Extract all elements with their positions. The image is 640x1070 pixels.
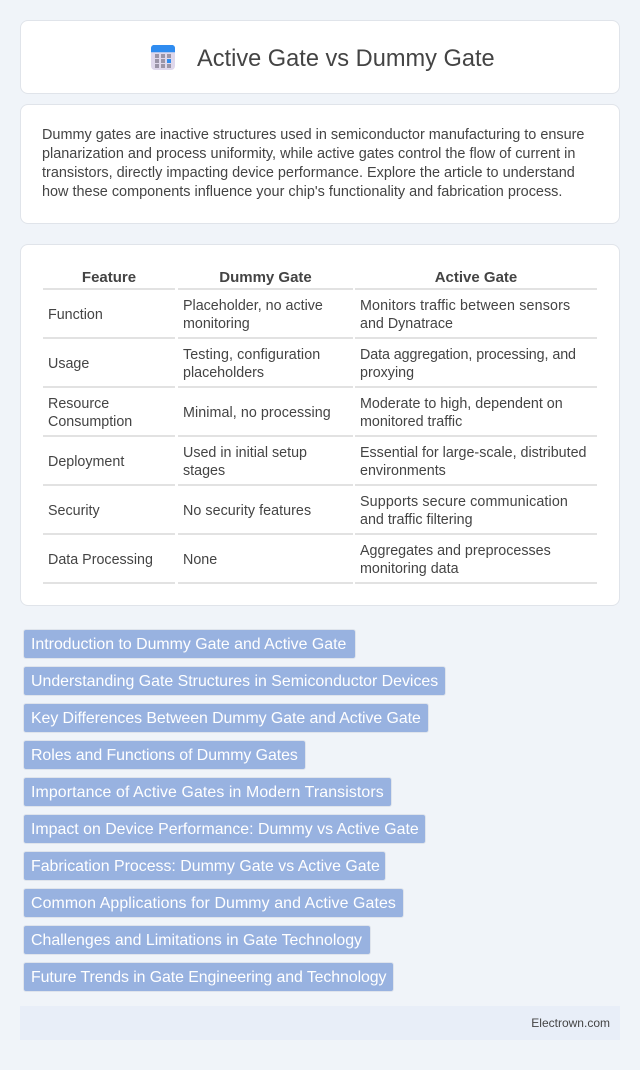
row: usage <box>48 347 576 381</box>
row: function: Function <box>48 307 103 323</box>
row: resource consumption: Resource <box>48 396 109 412</box>
row: resource consumption: Moderate to high, dependent on <box>360 396 563 412</box>
intro text panel <box>20 104 620 224</box>
row: data processing <box>48 543 551 577</box>
row: usage: proxying <box>360 365 414 381</box>
row: function: Monitors traffic between sensors <box>360 298 570 314</box>
row: deployment <box>48 445 586 479</box>
table header <box>82 269 517 286</box>
footer bar <box>20 1006 620 1040</box>
button: impact <box>23 814 426 844</box>
title: Active Gate vs Dummy Gate <box>197 46 495 72</box>
footer credit: Electrown.com <box>531 1016 610 1030</box>
icon: calendar grid <box>151 45 175 70</box>
button: challenges <box>23 925 371 955</box>
button: applications: Common Applications for Dummy and Active Gates <box>31 895 396 912</box>
row: deployment: Deployment <box>48 454 124 470</box>
button: future trends: Future Trends in Gate Engineering and Technology <box>31 969 386 986</box>
table header: Dummy Gate <box>219 269 312 286</box>
button: key differences: Key Differences Between Dummy Gate and Active Gate <box>31 710 421 727</box>
row: deployment: environments <box>360 463 446 479</box>
button: importance: Importance of Active Gates in Modern Transistors <box>31 784 384 801</box>
row: usage: Testing, configuration <box>183 347 320 363</box>
button: roles <box>23 740 306 770</box>
header card <box>20 20 620 94</box>
button: fabrication <box>23 851 386 881</box>
row: usage: Data aggregation, processing, and <box>360 347 576 363</box>
button: introduction <box>23 629 356 659</box>
button: introduction: Introduction to Dummy Gate and Active Gate <box>31 636 346 653</box>
row: resource consumption <box>48 396 563 430</box>
table header: Feature <box>82 269 136 286</box>
button: understanding <box>23 666 446 696</box>
button: impact: Impact on Device Performance: Dummy vs Active Gate <box>31 821 419 838</box>
intro paragraph: transistors, directly impacting device performance. Explore the article to understand <box>42 165 575 181</box>
row: security: No security features <box>183 503 311 519</box>
table header: Active Gate <box>435 269 517 286</box>
row: function: monitoring <box>183 316 250 332</box>
row: security: and traffic filtering <box>360 512 473 528</box>
row: data processing: Aggregates and preprocesses <box>360 543 551 559</box>
row: security <box>48 494 568 528</box>
row: usage: Usage <box>48 356 89 372</box>
row: deployment: Used in initial setup <box>183 445 307 461</box>
row: data processing: None <box>183 552 217 568</box>
button: understanding: Understanding Gate Structures in Semiconductor Devices <box>31 673 438 690</box>
row: security: Security <box>48 503 100 519</box>
row: resource consumption: monitored traffic <box>360 414 462 430</box>
row: function: and Dynatrace <box>360 316 453 332</box>
comparison table panel <box>20 244 620 606</box>
button: roles: Roles and Functions of Dummy Gates <box>31 747 298 764</box>
intro paragraph <box>42 127 584 200</box>
row: resource consumption: Consumption <box>48 414 132 430</box>
comparison table <box>43 269 597 584</box>
row: data processing: Data Processing <box>48 552 153 568</box>
row: security: Supports secure communication <box>360 494 568 510</box>
button: key differences <box>23 703 429 733</box>
row: function: Placeholder, no active <box>183 298 323 314</box>
row: usage: placeholders <box>183 365 264 381</box>
row: function <box>48 298 570 332</box>
button: challenges: Challenges and Limitations in Gate Technology <box>31 932 362 949</box>
button: future trends <box>23 962 394 992</box>
row: resource consumption: Minimal, no processing <box>183 405 331 421</box>
intro paragraph: how these components influence your chip's functionality and fabrication process. <box>42 184 562 200</box>
row: deployment: stages <box>183 463 225 479</box>
row: data processing: monitoring data <box>360 561 459 577</box>
intro paragraph: planarization and process uniformity, while active gates control the flow of current in <box>42 146 575 162</box>
row: deployment: Essential for large-scale, distributed <box>360 445 586 461</box>
intro paragraph: Dummy gates are inactive structures used in semiconductor manufacturing to ensure <box>42 127 584 143</box>
topic link buttons <box>23 629 446 992</box>
button: fabrication: Fabrication Process: Dummy Gate vs Active Gate <box>31 858 380 875</box>
button: applications <box>23 888 404 918</box>
button: importance <box>23 777 392 807</box>
